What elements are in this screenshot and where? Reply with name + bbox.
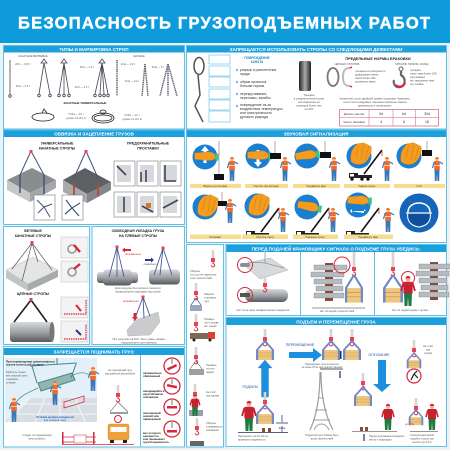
prohibited texts: неправильно <box>143 371 162 375</box>
panel: lifting and moving <box>226 318 446 446</box>
rejection table: 3d <box>379 112 383 116</box>
prohibited texts: находящийся в <box>143 389 165 393</box>
caption text: Передвинуть кран <box>358 237 378 239</box>
column text: груз <box>204 300 210 303</box>
sleeve caption: Трещины <box>303 93 315 97</box>
caption text <box>203 186 422 239</box>
title band: БЕЗОПАСНОСТЬ ГРУЗОПОДЪЕМНЫХ РАБОТ <box>18 14 430 32</box>
panel: free placement <box>92 226 184 344</box>
panel: sling types: 2СК — 3,15 т <box>15 62 32 66</box>
sleeve caption <box>294 93 325 111</box>
rejection table: 30d <box>424 112 430 116</box>
rope damage list: переломы, залибы <box>240 96 271 100</box>
norm notes: нет клейма <box>410 82 424 86</box>
rejection table: 6 <box>403 120 405 124</box>
truck under load: Не перемещай груз <box>108 368 133 372</box>
move step: не ниже 0,5 м над препятствиями <box>302 365 343 369</box>
concrete slab right <box>63 150 111 203</box>
move step <box>286 329 361 369</box>
prohibited texts: примерзший <box>143 417 161 421</box>
small lowering and prohibition <box>405 340 438 444</box>
arrow: blue <box>145 258 154 262</box>
column text: и проверь <box>204 296 217 300</box>
norm notes: износ зева более 10% <box>410 72 438 76</box>
move step: ПЕРЕМЕЩЕНИЕ <box>286 343 315 347</box>
prohibited texts: вес которого <box>143 431 161 435</box>
column text: Убедись <box>206 421 217 425</box>
panel: sling types: 1СЦ — 2,0 т <box>121 62 136 66</box>
panel: sling types: 3СЦ — 5 т <box>152 65 165 69</box>
captions: Для разгрузки без снятия в плоскости <box>115 286 161 290</box>
rejection norms heading: ЦЕПНЫХ СТРОПОВ <box>335 62 360 66</box>
panel: branch and chain slings: ЦЕПНЫЕ СТРОПЫ <box>17 292 50 296</box>
rope damage list: или электрического <box>240 111 272 115</box>
panel: sling types: 4СК — 6,3 т <box>75 85 90 89</box>
prohibited loads <box>164 358 180 437</box>
slab on branch sling <box>6 241 58 291</box>
concrete slab left <box>7 150 56 202</box>
column text: под грузом <box>206 394 219 398</box>
norm notes: трещины <box>410 69 421 72</box>
panel: sling defects: ЗАПРЕЩАЕТСЯ ИСПОЛЬЗОВАТЬ СТРОПЫ СО СЛЕДУЮЩИМИ ДЕФЕКТАМИ <box>230 47 402 52</box>
icon: hard hat mandatory <box>400 194 438 232</box>
fence: места работы <box>29 436 45 440</box>
norm notes: трещины на поверхности <box>355 70 386 73</box>
rope damage list: перекручивание, <box>240 92 267 96</box>
long load scene: Работать только <box>6 370 26 374</box>
small lowering and prohibition: Стропальщик может <box>410 433 435 437</box>
protective spacers grid <box>114 161 181 217</box>
rope damage list: воздействия температуры <box>240 107 283 111</box>
prohibited texts: грузоподъемность <box>143 440 169 444</box>
hook loads <box>214 141 432 206</box>
rejection norms heading: ПРЕДЕЛЬНЫЕ НОРМЫ БРАКОВКИ <box>345 57 411 61</box>
long load scene: грузов используй оттяжки <box>6 362 44 366</box>
caption text: Опустить стрелу <box>256 237 275 239</box>
small lowering and prohibition: Не стой <box>423 344 433 348</box>
move step: Перемещать груз на высоте <box>305 362 340 366</box>
panel: load rigging: ОБВЯЗКА И ЗАЦЕПЛЕНИЕ ГРУЗОВ <box>54 132 134 136</box>
panel: branch and chain slings <box>4 226 90 344</box>
rope damage list: пряди <box>240 72 250 76</box>
panel: sling types: длина 1,0–8,0 м <box>122 117 142 121</box>
panel: sling types: ЦЕПНЫЕ <box>133 54 145 58</box>
column text: Убедись, <box>190 269 201 273</box>
truck under load <box>105 368 136 443</box>
icon: lifting hook <box>394 67 405 87</box>
rope damage list: повреждение из-за <box>240 103 271 107</box>
eiffel tower: выше препятствий <box>311 436 334 440</box>
sling close-up cards <box>34 195 83 220</box>
lower step: Перед опусканием проверить <box>369 434 405 438</box>
panel: branch and chain slings: ВЕТЕВЫЕ <box>24 229 42 233</box>
norm notes <box>355 69 438 86</box>
panel: sling types: УСК1 — 10 т <box>68 112 84 116</box>
column text: что груз не закреплен <box>190 274 217 276</box>
long load scene: вне опасной зоны <box>44 418 66 422</box>
pipe wrong <box>97 246 138 286</box>
column text <box>190 269 223 432</box>
rejection norms heading: КРЮКОВ, ПЕТЕЛЬ, КОЛЕЦ <box>395 62 429 66</box>
pipe on chain sling <box>10 298 54 342</box>
panel: load rigging: КАНАТНЫЕ СТРОПЫ <box>39 146 76 150</box>
signal icons <box>192 144 422 220</box>
sleeve caption: размеров более чем <box>297 104 322 108</box>
title band <box>0 0 450 43</box>
panel: free placement: СВОБОДНАЯ УКЛАДКА ГРУЗА <box>112 229 165 233</box>
hook detail cards <box>61 237 88 342</box>
caption text: Передвинуть кран <box>306 186 326 188</box>
panel: sling types: УСК2 — 16 т <box>124 113 140 117</box>
yellow captions <box>190 184 445 239</box>
panel: sling types: длина 1,0–8,0 м <box>66 116 86 120</box>
universal loop slings <box>32 109 114 123</box>
lower step: место и подкладки <box>369 438 392 442</box>
workers <box>226 157 443 232</box>
captions: предусмотрите подкладки под грузом <box>115 290 161 294</box>
panel: lifting checks column <box>186 244 224 447</box>
column text: в надежности <box>206 426 223 428</box>
panel: sling types: 4СК — 5,0 т <box>16 84 31 88</box>
caption bottom: При нагрузках на КОС части, рамы, шкафы, <box>112 337 166 341</box>
rejection table: Длина участка <box>344 112 364 116</box>
rope damage list: обрыв проволок <box>240 80 267 84</box>
check 3: worker by stack: Нет ли людей рядом с грузом <box>392 308 428 312</box>
small lowering and prohibition: под <box>426 348 431 352</box>
icon: chain link <box>328 67 352 87</box>
panel: sling defects <box>186 46 446 129</box>
rejection table <box>340 110 438 126</box>
column text: Проверь, <box>206 363 217 367</box>
column text: Проверь <box>204 317 215 321</box>
icon: damaged rope eye <box>194 58 204 122</box>
captions <box>115 253 161 294</box>
rope slings <box>9 59 109 97</box>
caption bottom <box>112 337 166 344</box>
rejection table: 16 <box>425 120 429 124</box>
panel: sling types: ТИПЫ И МАРКИРОВКА СТРОП <box>59 47 129 52</box>
caption bottom: предусмотрите для переноса <box>121 342 157 344</box>
panel: load rigging: ПРОСТАВКИ <box>137 146 159 150</box>
panel: forbidden to lift: ЗАПРЕЩАЕТСЯ ПОДНИМАТЬ ГРУЗ: <box>53 350 135 354</box>
rejection norms heading <box>335 57 429 66</box>
rejection paragraph <box>340 96 411 108</box>
panel: load rigging: УНИВЕРСАЛЬНЫЕ <box>41 142 74 146</box>
panel: sling types: КАНАТНЫЕ УНИВЕРСАЛЬНЫЕ <box>64 101 107 105</box>
norm notes: деформация звена <box>355 72 379 76</box>
long load scene <box>5 358 99 422</box>
sleeve caption: в соединительной втулке <box>294 96 325 100</box>
small lowering and prohibition: подойти к грузу при <box>410 436 434 440</box>
column text: нет людей <box>204 324 217 328</box>
long load scene: оттяжки <box>6 382 16 384</box>
panel: sling types: КАНАТНЫЕ ВЕТВЕВЫЕ <box>18 54 48 58</box>
rope damage list: разрыв и расплетение <box>240 68 276 72</box>
captions: правильно <box>144 263 157 266</box>
column text: людей <box>206 370 214 374</box>
rejection paragraph: если число видимых обрывов проволок каната <box>343 100 407 104</box>
truck under load: над кабиной автомобиля <box>105 372 136 376</box>
defect callouts <box>209 55 230 122</box>
icon: cracked sleeve <box>299 61 311 91</box>
rejection paragraph: Канатный строп двойной свивки подлежит браковке, <box>340 96 411 100</box>
column text: что нет <box>206 368 215 370</box>
small lowering and prohibition: до 0,5м <box>405 422 414 426</box>
column text: что в кузове <box>204 322 219 324</box>
small lowering and prohibition: высоте до 0,5 м <box>412 440 432 444</box>
norm notes: скручивание <box>410 76 426 79</box>
chain slings <box>117 60 177 96</box>
rejection table: 4 <box>380 120 382 124</box>
prohibited texts: землей или <box>143 414 159 418</box>
caption text: Поднять груз или крюк <box>203 186 228 188</box>
pipe right <box>149 246 180 284</box>
panel: before signalling <box>226 244 450 316</box>
norm notes: удлинение звена <box>355 80 376 84</box>
long load scene: При перемещении длинномерных <box>6 360 55 364</box>
cranes <box>246 150 382 239</box>
lift step: 30 см <box>279 426 286 430</box>
panel: load rigging: ПРЕДОХРАНИТЕЛЬНЫЕ <box>127 142 170 146</box>
caption text: Опустить груз или крюк <box>253 186 279 188</box>
small lowering and prohibition: грузом <box>424 352 432 355</box>
rejection table: Число обрывов <box>343 120 365 124</box>
rope damage list: больше нормы <box>240 84 265 88</box>
panel: before signalling: ПЕРЕД ПОДАЧЕЙ КРАНОВЩИКУ СИГНАЛА О ПОДЪЕМЕ ГРУЗА УБЕДИСЬ: <box>252 244 421 252</box>
long load scene: Оттяжка должна находиться <box>36 415 74 419</box>
panel: sling types: 2СЦ — 3,2 т <box>125 79 140 83</box>
lift step: ПОДЪЕМ <box>242 385 258 389</box>
sleeve caption: или изменение ее <box>298 101 320 104</box>
fence: Следит за ограждением <box>22 433 52 437</box>
panel: sound signals <box>186 130 446 242</box>
arrow: red <box>122 248 131 252</box>
lift step <box>238 329 288 442</box>
lift step: Приподнять на 20–30 см, <box>238 434 269 438</box>
column text: Закрепи <box>204 292 214 296</box>
long load scene: вне опасной зоны <box>6 374 28 378</box>
caption text: Стоп <box>416 186 422 188</box>
check 3: worker by stack <box>383 252 450 312</box>
loads <box>189 298 215 446</box>
lower step <box>352 353 405 442</box>
caption text: Осторожно <box>209 237 222 239</box>
panel: branch and chain slings: КАНАТНЫЕ СТРОПЫ <box>15 234 52 238</box>
panel: sling types: 3СК — 4,0 т <box>80 65 95 69</box>
rejection paragraph: диаметром d превышает: <box>358 104 392 108</box>
sleeve caption: на 10% <box>305 107 314 111</box>
prohibited texts: засыпанный <box>143 411 161 415</box>
check 1: slab and pipe: Нет ли на грузе незакрепленных предметов <box>237 308 290 312</box>
rope damage list: ПОВРЕЖДЕНИЕ <box>244 56 270 60</box>
prohibited texts: или превышает <box>143 437 165 441</box>
long load scene: и держать <box>6 378 19 381</box>
check 2: stack with crate: Нет ли людей и препятствий <box>320 309 355 313</box>
eiffel tower <box>305 369 343 440</box>
fence <box>22 432 134 444</box>
column text: основания <box>206 429 219 432</box>
rope damage list <box>236 56 283 119</box>
column text: Не стой <box>206 390 216 394</box>
prohibited texts: положении <box>143 395 159 399</box>
panel: load rigging <box>4 130 184 224</box>
caption text: Поднять стрелу <box>359 186 376 188</box>
column text: и нет препятствий <box>190 276 212 280</box>
check 2: stack with crate <box>311 252 365 313</box>
prohibited texts <box>143 371 169 444</box>
eiffel tower: Поднятый груз обязан быть <box>305 433 339 437</box>
signal hands <box>195 143 421 216</box>
caption text: Повернуть стрелу <box>305 237 325 239</box>
lower step: ОПУСКАНИЕ <box>368 353 390 357</box>
casting load: неправильно <box>123 300 139 303</box>
check 1: slab and pipe <box>237 252 290 312</box>
lift step: проверить надежность <box>238 438 266 442</box>
norm notes: износ более 10% <box>355 76 376 80</box>
panel: free placement: НА ПЛЕВЫЕ СТРОПЫ <box>119 234 158 238</box>
panel: lifting and moving: ПОДЪЕМ И ПЕРЕМЕЩЕНИЕ ГРУЗА <box>296 320 376 324</box>
rope damage list: дугового разряда <box>240 115 268 119</box>
panel: forbidden to lift <box>4 346 184 447</box>
panel: sling types <box>4 46 184 129</box>
prohibited texts: неустойчивом <box>143 392 163 396</box>
rejection table: 6d <box>402 112 406 116</box>
panel: sound signals: ЗВУКОВАЯ СИГНАЛИЗАЦИЯ <box>284 132 348 136</box>
norm notes: нет замыкания зева <box>410 80 435 82</box>
prohibited texts: обвязанный <box>143 374 160 378</box>
captions: неправильно <box>125 253 141 256</box>
rope damage list: КАНАТА <box>251 60 264 64</box>
prohibited texts: неизвестен <box>143 434 159 438</box>
